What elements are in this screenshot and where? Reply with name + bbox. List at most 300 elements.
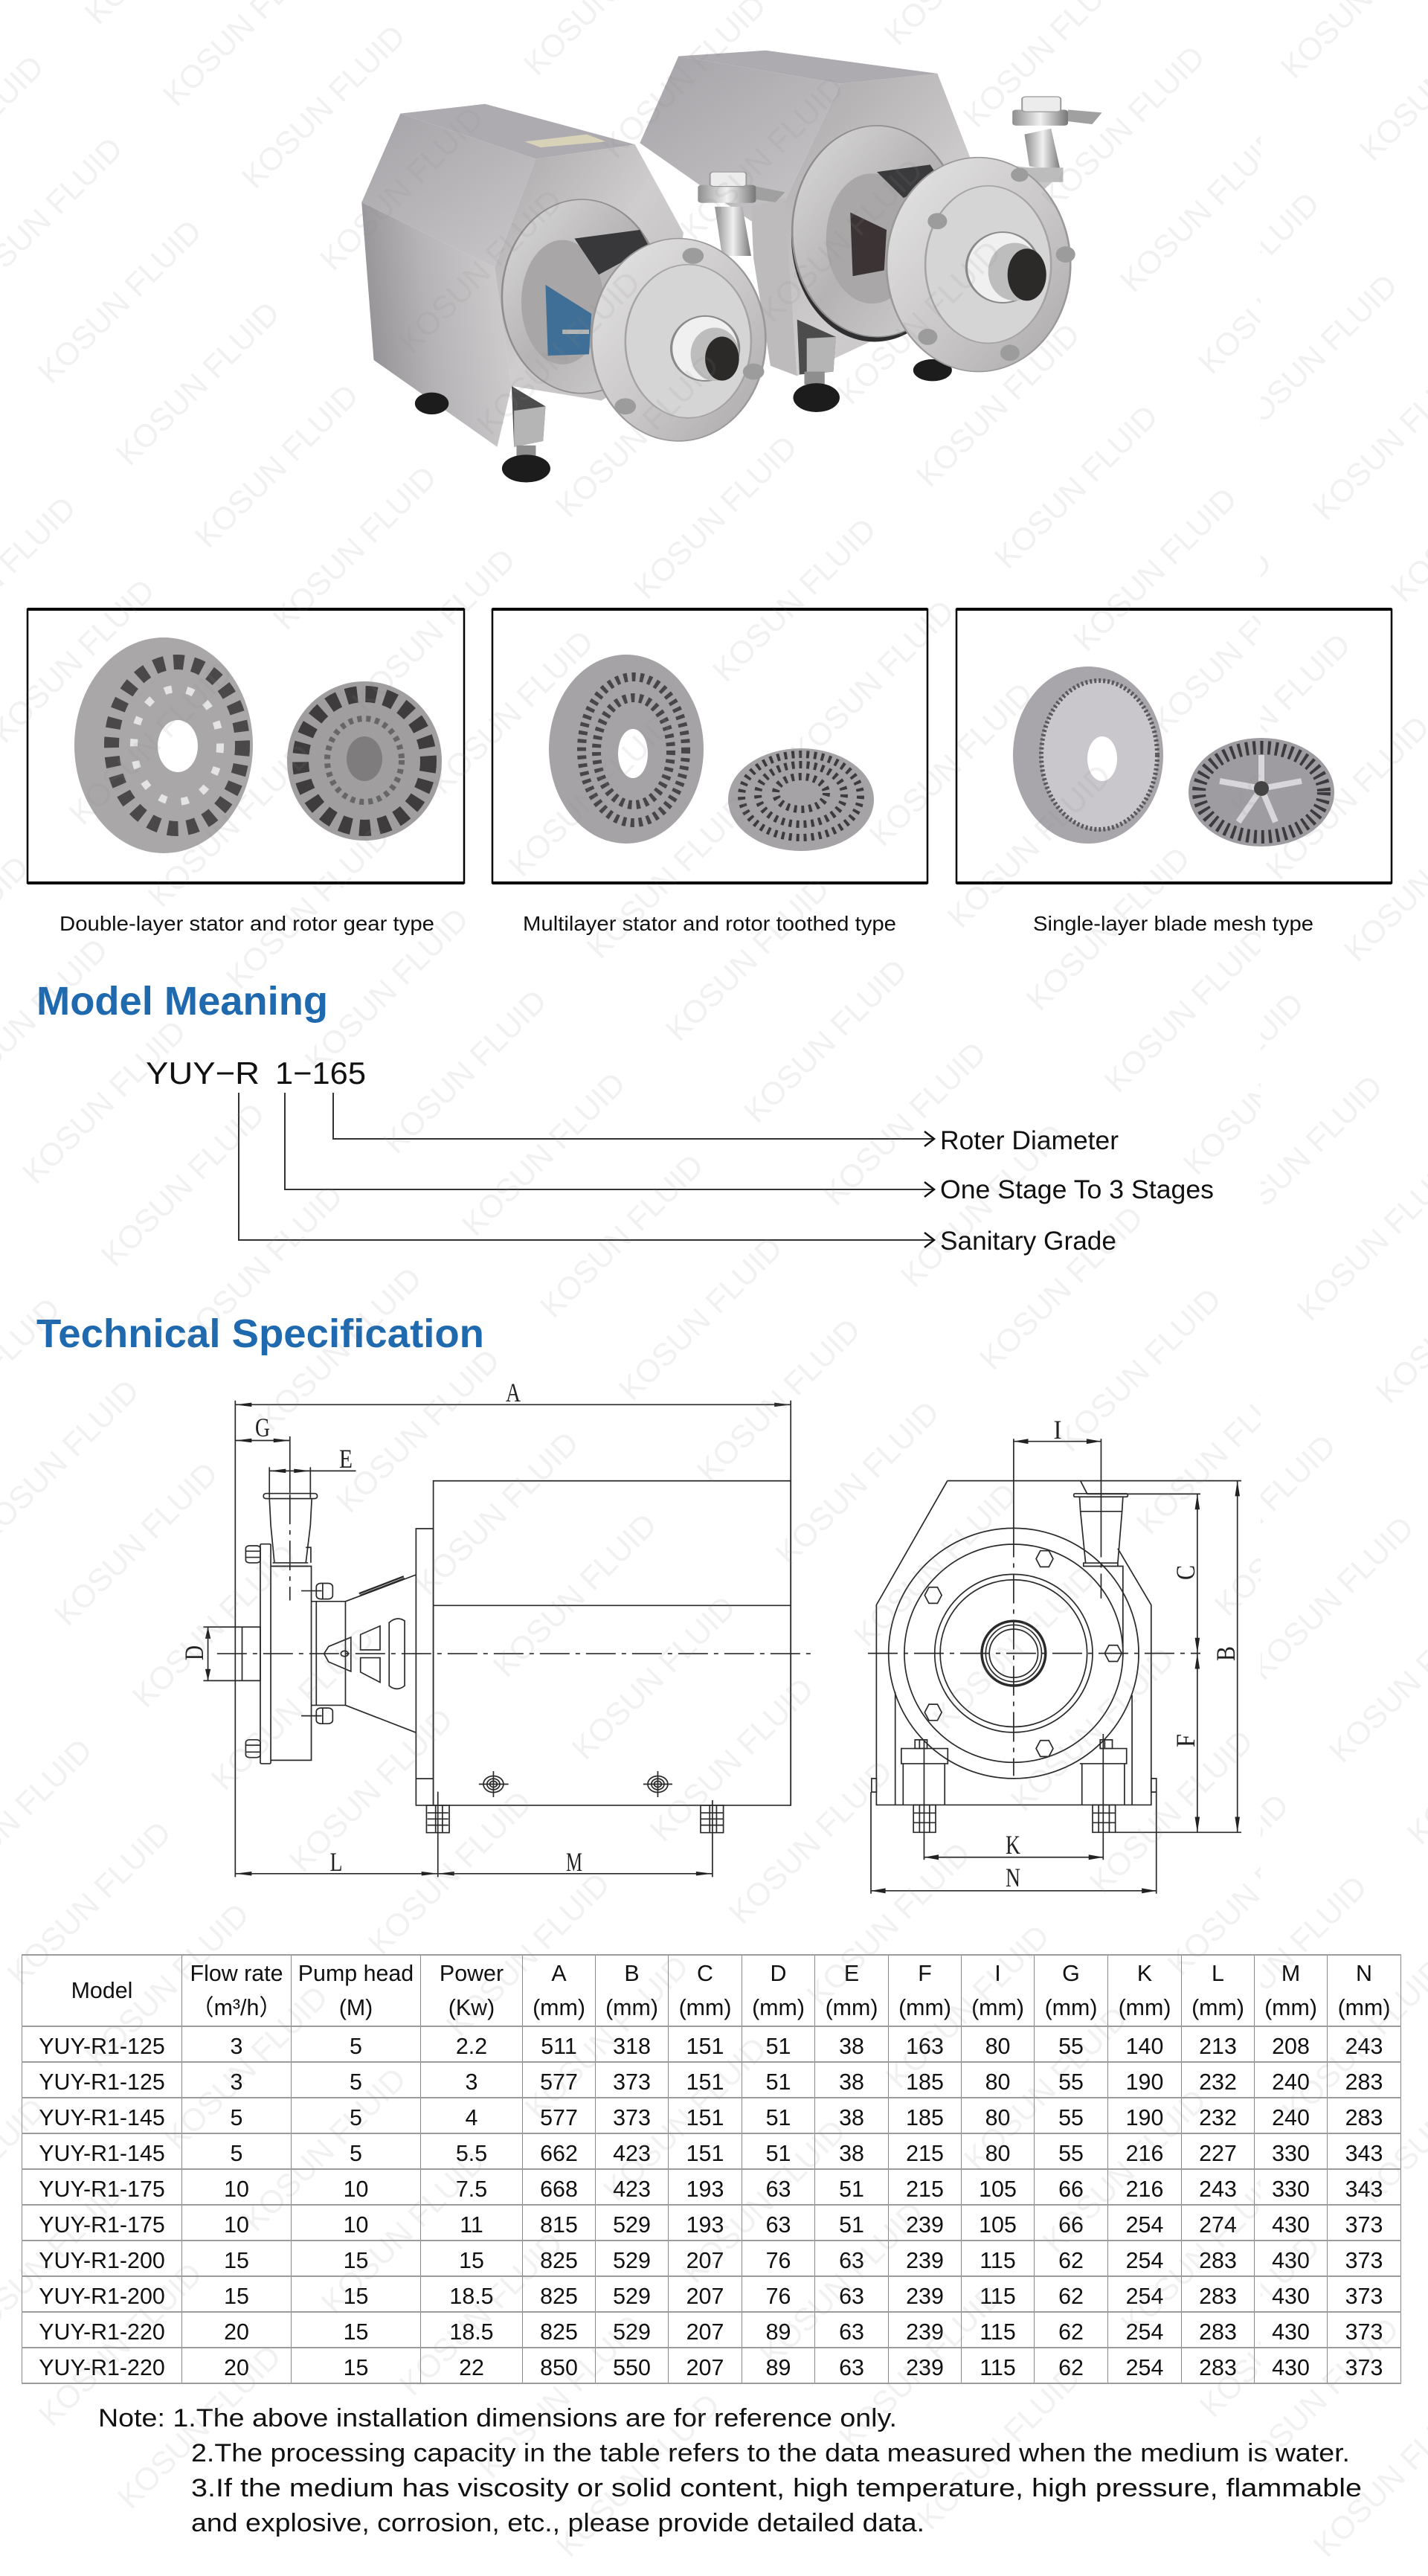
- table header row: 51: [766, 2105, 791, 2130]
- watermark overlay: KOSUN FLUID: [1161, 1805, 1339, 1982]
- table header row: 11: [460, 2212, 483, 2238]
- watermark overlay: KOSUN FLUID: [1244, 1510, 1421, 1687]
- watermark overlay: KOSUN FLUID: [879, 1918, 1057, 2095]
- table header row: 62: [1058, 2284, 1084, 2309]
- table header row: 115: [980, 2248, 1016, 2273]
- table header row: 51: [766, 2141, 791, 2166]
- rotor disc: [1189, 738, 1334, 847]
- table header row: 343: [1345, 2177, 1383, 2202]
- table header row: 239: [906, 2248, 944, 2273]
- watermark overlay: KOSUN FLUID: [1133, 986, 1311, 1163]
- watermark overlay: KOSUN FLUID: [1087, 1346, 1264, 1523]
- watermark overlay: KOSUN FLUID: [1004, 1641, 1182, 1818]
- table header row: YUY-R1-175: [39, 2177, 165, 2202]
- watermark overlay: KOSUN FLUID: [32, 2256, 210, 2433]
- table header row: 51: [839, 2212, 864, 2238]
- watermark overlay: KOSUN FLUID: [94, 1096, 272, 1273]
- table header row: E: [844, 1961, 859, 1986]
- table header row: 243: [1345, 2034, 1383, 2059]
- label: stages: One Stage To 3 Stages: [940, 1175, 1214, 1204]
- table header row: 20: [224, 2355, 249, 2380]
- model code: [146, 1056, 366, 1091]
- watermark overlay: KOSUN FLUID: [722, 1754, 900, 1931]
- watermark overlay: KOSUN FLUID: [659, 871, 837, 1048]
- table header row: 550: [613, 2355, 651, 2380]
- table header row: 63: [766, 2177, 791, 2202]
- table header row: 63: [766, 2212, 791, 2238]
- table header row: F: [918, 1961, 932, 1986]
- watermark overlay: KOSUN FLUID: [423, 624, 601, 801]
- table header row: 62: [1058, 2248, 1084, 2273]
- model code: YUY−R: [146, 1056, 260, 1091]
- watermark overlay: KOSUN FLUID: [1067, 481, 1244, 658]
- table header row: 662: [540, 2141, 578, 2166]
- table header row: 330: [1272, 2177, 1310, 2202]
- table header row: 51: [839, 2177, 864, 2202]
- table header row: 7.5: [456, 2177, 487, 2202]
- watermark overlay: KOSUN FLUID: [800, 1836, 978, 2013]
- watermark overlay: KOSUN FLUID: [769, 1395, 947, 1572]
- table header row: (mm): [1045, 1995, 1097, 2020]
- table header row: K: [1137, 1961, 1152, 1986]
- watermark overlay: KOSUN FLUID: [173, 1178, 350, 1355]
- table header row: 254: [1126, 2212, 1163, 2238]
- table header row: 529: [613, 2319, 651, 2345]
- table header row: 15: [459, 2248, 484, 2273]
- panel: multilayer stator and rotor toothed type: [492, 609, 927, 883]
- table header row: 243: [1199, 2177, 1237, 2202]
- table header row: 239: [906, 2319, 944, 2345]
- watermark overlay: KOSUN FLUID: [298, 902, 476, 1079]
- watermark overlay: KOSUN FLUID: [236, 2061, 414, 2238]
- table header row: 140: [1126, 2034, 1163, 2059]
- table header row: 55: [1058, 2105, 1084, 2130]
- watermark overlay: KOSUN FLUID: [533, 1148, 711, 1325]
- table header row: 825: [540, 2284, 578, 2309]
- watermark overlay: KOSUN FLUID: [737, 953, 915, 1130]
- watermark overlay: KOSUN FLUID: [283, 1702, 460, 1879]
- table header row: 283: [1199, 2319, 1237, 2345]
- table header row: 430: [1272, 2355, 1310, 2380]
- table header row: 163: [906, 2034, 944, 2059]
- watermark overlay: KOSUN FLUID: [550, 2387, 727, 2564]
- table header row: 190: [1126, 2069, 1163, 2095]
- watermark overlay: KOSUN FLUID: [188, 378, 366, 555]
- watermark overlay: KOSUN FLUID: [313, 100, 491, 277]
- table header row: 208: [1272, 2034, 1310, 2059]
- table header row: 51: [766, 2034, 791, 2059]
- table header row: 318: [613, 2034, 651, 2059]
- caption: double-layer: Double-layer stator and rotor gear type: [60, 912, 434, 935]
- dimension label B: B: [1211, 1646, 1241, 1661]
- watermark overlay: KOSUN FLUID: [612, 1230, 790, 1407]
- table header row: Pump head: [298, 1961, 414, 1986]
- watermark overlay: KOSUN FLUID: [219, 819, 397, 996]
- table header row: 63: [839, 2319, 864, 2345]
- table header row: 18.5: [449, 2284, 494, 2309]
- rotor disc: [728, 748, 874, 851]
- table header row: B: [624, 1961, 640, 1986]
- table header row: 240: [1272, 2069, 1310, 2095]
- watermark overlay: KOSUN FLUID: [863, 676, 1041, 853]
- table header row: 529: [613, 2284, 651, 2309]
- watermark overlay: KOSUN FLUID: [549, 347, 727, 524]
- table header row: YUY-R1-200: [39, 2284, 165, 2309]
- table header row: 38: [839, 2105, 864, 2130]
- table header row: 51: [766, 2069, 791, 2095]
- dimension label L: L: [330, 1847, 342, 1877]
- watermark overlay: KOSUN FLUID: [816, 1035, 994, 1212]
- table header row: YUY-R1-220: [39, 2355, 165, 2380]
- table header row: 55: [1058, 2141, 1084, 2166]
- table header row: 850: [540, 2355, 578, 2380]
- table header row: (mm): [1191, 1995, 1244, 2020]
- table header row: 254: [1126, 2355, 1163, 2380]
- table header row: 274: [1199, 2212, 1237, 2238]
- watermark overlay: KOSUN FLUID: [580, 788, 758, 966]
- watermark overlay: KOSUN FLUID: [518, 1949, 696, 2126]
- watermark overlay: KOSUN FLUID: [1212, 1069, 1390, 1246]
- watermark overlay: KOSUN FLUID: [926, 1559, 1104, 1736]
- table header row: 62: [1058, 2355, 1084, 2380]
- watermark overlay: KOSUN FLUID: [472, 2308, 649, 2485]
- table header row: (M): [339, 1995, 373, 2020]
- table header row: (mm): [1264, 1995, 1317, 2020]
- table header row: 213: [1199, 2034, 1237, 2059]
- caption: single-layer: Single-layer blade mesh type: [1033, 912, 1313, 935]
- table header row: 5: [350, 2069, 362, 2095]
- watermark overlay: KOSUN FLUID: [1020, 841, 1197, 1018]
- table header row: 5: [350, 2105, 362, 2130]
- table header row: 215: [906, 2141, 944, 2166]
- table header row: Power: [440, 1961, 504, 1986]
- table header row: 430: [1272, 2284, 1310, 2309]
- table header row: 239: [906, 2355, 944, 2380]
- watermark overlay: KOSUN FLUID: [1130, 1364, 1308, 1541]
- watermark overlay: KOSUN FLUID: [31, 213, 209, 391]
- watermark overlay: KOSUN FLUID: [502, 707, 680, 884]
- table header row: 55: [1058, 2069, 1084, 2095]
- watermark overlay: KOSUN FLUID: [315, 2144, 492, 2321]
- table header row: Model: [71, 1978, 132, 2003]
- watermark overlay: KOSUN FLUID: [455, 1066, 633, 1243]
- table header row: 151: [686, 2069, 724, 2095]
- watermark overlay: KOSUN FLUID: [1180, 627, 1358, 804]
- specification table: [22, 1954, 1401, 2384]
- watermark overlay: KOSUN FLUID: [690, 1312, 868, 1489]
- table header row: YUY-R1-175: [39, 2212, 165, 2238]
- table header row: 76: [766, 2284, 791, 2309]
- table header row: 430: [1272, 2319, 1310, 2345]
- watermark overlay: KOSUN FLUID: [941, 758, 1119, 935]
- table header row: N: [1356, 1961, 1372, 1986]
- table header row: Flow rate: [190, 1961, 283, 1986]
- label: sanitary grade: Sanitary Grade: [940, 1227, 1116, 1256]
- panel: double-layer stator and rotor gear type: [28, 609, 464, 883]
- watermark overlay: KOSUN FLUID: [988, 399, 1165, 576]
- caption: multilayer: Multilayer stator and rotor toothed type: [523, 912, 896, 935]
- table header row: 151: [686, 2034, 724, 2059]
- watermark overlay: KOSUN FLUID: [1150, 2229, 1328, 2406]
- table header row: 15: [344, 2319, 368, 2345]
- watermark overlay: KOSUN FLUID: [440, 1866, 617, 2043]
- watermark overlay: KOSUN FLUID: [674, 70, 852, 247]
- table header row: 18.5: [449, 2319, 494, 2345]
- watermark overlay: KOSUN FLUID: [16, 1014, 193, 1191]
- watermark overlay: KOSUN FLUID: [1193, 2247, 1371, 2424]
- table header row: (mm): [971, 1995, 1024, 2020]
- dimension label E: E: [339, 1444, 353, 1474]
- dimension label D: D: [179, 1645, 209, 1660]
- table header row: 207: [686, 2355, 724, 2380]
- table header row: 80: [985, 2141, 1010, 2166]
- table header row: 5: [350, 2034, 362, 2059]
- table header row: 151: [686, 2141, 724, 2166]
- table header row: 815: [540, 2212, 578, 2238]
- table header row: YUY-R1-145: [39, 2141, 165, 2166]
- table header row: 105: [979, 2177, 1017, 2202]
- dimension label G: G: [255, 1413, 270, 1442]
- watermark overlay: KOSUN FLUID: [266, 460, 444, 637]
- table header row: 15: [344, 2284, 368, 2309]
- stator disc: [549, 655, 704, 844]
- table header row: 3: [231, 2034, 242, 2059]
- table header row: [39, 1961, 1390, 2380]
- label: roter diameter: Roter Diameter: [940, 1126, 1119, 1155]
- table header row: 20: [224, 2319, 249, 2345]
- table header row: 207: [686, 2284, 724, 2309]
- table header row: 55: [1058, 2034, 1084, 2059]
- table header row: C: [697, 1961, 713, 1986]
- table header row: 373: [1345, 2355, 1383, 2380]
- table header row: 373: [613, 2105, 651, 2130]
- table header row: 22: [459, 2355, 484, 2380]
- watermark overlay: KOSUN FLUID: [1177, 1005, 1354, 1182]
- table header row: （m³/h）: [191, 1995, 282, 2020]
- table header row: 38: [839, 2034, 864, 2059]
- table header row: 529: [613, 2248, 651, 2273]
- table header row: D: [771, 1961, 786, 1986]
- table header row: 283: [1199, 2284, 1237, 2309]
- watermark overlay: KOSUN FLUID: [643, 1671, 821, 1849]
- table header row: 232: [1199, 2105, 1237, 2130]
- table header row: YUY-R1-200: [39, 2248, 165, 2273]
- table header row: 373: [1345, 2212, 1383, 2238]
- watermark overlay: KOSUN FLUID: [957, 2000, 1135, 2177]
- stator disc: [1013, 667, 1163, 844]
- table header row: (mm): [533, 1995, 585, 2020]
- watermark overlay: KOSUN FLUID: [1036, 2083, 1214, 2260]
- watermark overlay: KOSUN FLUID: [1197, 1869, 1374, 2046]
- leader lines and arrows: [239, 1093, 933, 1240]
- front pump: [361, 104, 785, 483]
- table header row: 825: [540, 2319, 578, 2345]
- table header row: (Kw): [448, 1995, 495, 2020]
- table header row: 668: [540, 2177, 578, 2202]
- watermark overlay: KOSUN FLUID: [1098, 922, 1276, 1099]
- watermark overlay: KOSUN FLUID: [832, 2278, 1010, 2455]
- table header row: 423: [613, 2177, 651, 2202]
- table header row: M: [1281, 1961, 1300, 1986]
- table header row: 216: [1126, 2177, 1163, 2202]
- table header row: (mm): [679, 1995, 731, 2020]
- table header row: 207: [686, 2319, 724, 2345]
- table header row: 373: [613, 2069, 651, 2095]
- table header row: 5: [231, 2105, 242, 2130]
- table header row: 283: [1345, 2105, 1383, 2130]
- table header row: 227: [1199, 2141, 1237, 2166]
- watermark overlay: KOSUN FLUID: [1229, 2311, 1406, 2488]
- table header row: 2.2: [456, 2034, 487, 2059]
- watermark overlay: KOSUN FLUID: [1119, 1788, 1296, 1965]
- dimension label F: F: [1171, 1734, 1200, 1747]
- watermark overlay: KOSUN FLUID: [1227, 268, 1405, 445]
- watermark overlay: KOSUN FLUID: [408, 1425, 586, 1602]
- table header row: YUY-R1-145: [39, 2105, 165, 2130]
- table header row: A: [551, 1961, 567, 1986]
- watermark overlay: KOSUN FLUID: [1083, 1724, 1261, 1901]
- table header row: 5: [231, 2141, 242, 2166]
- dimension label K: K: [1006, 1830, 1020, 1860]
- table header row: 232: [1199, 2069, 1237, 2095]
- watermark overlay: KOSUN FLUID: [48, 1456, 225, 1633]
- table header row: 62: [1058, 2319, 1084, 2345]
- table header row: 89: [766, 2319, 791, 2345]
- table header row: 115: [980, 2284, 1016, 2309]
- watermark overlay: KOSUN FLUID: [235, 19, 413, 196]
- table header row: 38: [839, 2069, 864, 2095]
- dimension label C: C: [1171, 1565, 1200, 1580]
- table header row: 215: [906, 2177, 944, 2202]
- table header row: 193: [686, 2177, 724, 2202]
- table header row: 577: [540, 2069, 578, 2095]
- watermark overlay: KOSUN FLUID: [1165, 1428, 1343, 1605]
- watermark overlay: KOSUN FLUID: [251, 1261, 429, 1438]
- watermark overlay: KOSUN FLUID: [706, 512, 884, 689]
- table header row: 15: [224, 2248, 249, 2273]
- table header row: (mm): [752, 1995, 805, 2020]
- watermark overlay: KOSUN FLUID: [894, 1117, 1072, 1294]
- table header row: 115: [980, 2355, 1016, 2380]
- table header row: 330: [1272, 2141, 1310, 2166]
- rotor disc: [287, 681, 442, 841]
- watermark overlay: KOSUN FLUID: [111, 2339, 289, 2516]
- table header row: 254: [1126, 2248, 1163, 2273]
- stator disc: [74, 637, 253, 853]
- table header row: 239: [906, 2284, 944, 2309]
- watermark overlay: KOSUN FLUID: [973, 1200, 1151, 1377]
- drawing: front view of pump: [868, 1415, 1241, 1894]
- table header row: 15: [224, 2284, 249, 2309]
- table header row: (mm): [898, 1995, 951, 2020]
- table header row: 4: [466, 2105, 477, 2130]
- note 2: 2.The processing capacity in the table refers to the data measured when the medium is water.: [191, 2439, 1350, 2467]
- watermark overlay: KOSUN FLUID: [831, 234, 1009, 411]
- table header row: 511: [541, 2034, 577, 2059]
- notes: [98, 2404, 1362, 2537]
- table header row: 343: [1345, 2141, 1383, 2166]
- table header row: 63: [839, 2355, 864, 2380]
- watermark overlay: KOSUN FLUID: [393, 2226, 570, 2403]
- table header row: 63: [839, 2248, 864, 2273]
- watermark overlay: KOSUN FLUID: [753, 152, 930, 330]
- watermark overlay: KOSUN FLUID: [1113, 122, 1291, 299]
- table header row: 185: [906, 2105, 944, 2130]
- watermark overlay: KOSUN FLUID: [1114, 2165, 1292, 2342]
- table header row: 373: [1345, 2319, 1383, 2345]
- note 3: 3.If the medium has viscosity or solid content, high temperature, high pressure, flammable: [191, 2474, 1362, 2502]
- table header row: 89: [766, 2355, 791, 2380]
- table header row: 151: [686, 2105, 724, 2130]
- table header row: 15: [344, 2355, 368, 2380]
- watermark overlay: KOSUN FLUID: [158, 1979, 335, 2156]
- watermark overlay: KOSUN FLUID: [470, 265, 648, 442]
- watermark overlay: KOSUN FLUID: [753, 2195, 931, 2372]
- table header row: 240: [1272, 2105, 1310, 2130]
- table header row: 373: [1345, 2248, 1383, 2273]
- table header row: 80: [985, 2105, 1010, 2130]
- table header row: 825: [540, 2248, 578, 2273]
- table header row: 193: [686, 2212, 724, 2238]
- table header row: 5.5: [456, 2141, 487, 2166]
- table header row: (mm): [605, 1995, 658, 2020]
- watermark overlay: KOSUN FLUID: [1191, 204, 1369, 381]
- arrow heads: [924, 1131, 934, 1247]
- watermark overlay: KOSUN FLUID: [784, 594, 962, 771]
- watermark overlay: KOSUN FLUID: [596, 2031, 774, 2208]
- watermark overlay: KOSUN FLUID: [376, 983, 554, 1160]
- table header row: 3: [231, 2069, 242, 2095]
- watermark overlay: KOSUN FLUID: [126, 1538, 303, 1715]
- watermark overlay: KOSUN FLUID: [345, 542, 523, 719]
- note 1: Note: 1.The above installation dimensions are for reference only.: [98, 2404, 897, 2432]
- note 3 continued: and explosive, corrosion, etc., please provide detailed data.: [191, 2509, 924, 2537]
- watermark overlay: KOSUN FLUID: [910, 2360, 1088, 2537]
- table header row: 529: [613, 2212, 651, 2238]
- watermark overlay: KOSUN FLUID: [109, 295, 287, 472]
- table header row: 577: [540, 2105, 578, 2130]
- table header row: 430: [1272, 2212, 1310, 2238]
- product photo: two sanitary pumps: [361, 51, 1102, 483]
- dimension label I: I: [1053, 1415, 1062, 1445]
- table header row: 76: [766, 2248, 791, 2273]
- table header row: YUY-R1-125: [39, 2069, 165, 2095]
- table header row: 283: [1199, 2355, 1237, 2380]
- drawing: side view of pump: [179, 1378, 816, 1877]
- watermark overlay: KOSUN FLUID: [1, 1815, 178, 1992]
- table header row: (mm): [826, 1995, 878, 2020]
- table header row: 3: [466, 2069, 477, 2095]
- watermark overlay: KOSUN FLUID: [1223, 646, 1401, 823]
- model code: 1−165: [275, 1056, 366, 1091]
- table header row: 66: [1058, 2212, 1084, 2238]
- watermark overlay: KOSUN FLUID: [205, 1620, 382, 1797]
- table header row: YUY-R1-125: [39, 2034, 165, 2059]
- table header row: 38: [839, 2141, 864, 2166]
- watermark overlay: KOSUN FLUID: [847, 1477, 1025, 1654]
- watermark overlay: KOSUN FLUID: [1051, 1282, 1229, 1459]
- table header row: 66: [1058, 2177, 1084, 2202]
- table header row: YUY-R1-220: [39, 2319, 165, 2345]
- table header row: I: [994, 1961, 1001, 1986]
- table header row: 10: [344, 2212, 368, 2238]
- table header row: 115: [980, 2319, 1016, 2345]
- table header row: L: [1212, 1961, 1224, 1986]
- dimension label A: A: [506, 1378, 521, 1407]
- watermark overlay: KOSUN FLUID: [361, 1785, 539, 1962]
- table header row: 216: [1126, 2141, 1163, 2166]
- heading: model meaning: Model Meaning: [36, 979, 328, 1024]
